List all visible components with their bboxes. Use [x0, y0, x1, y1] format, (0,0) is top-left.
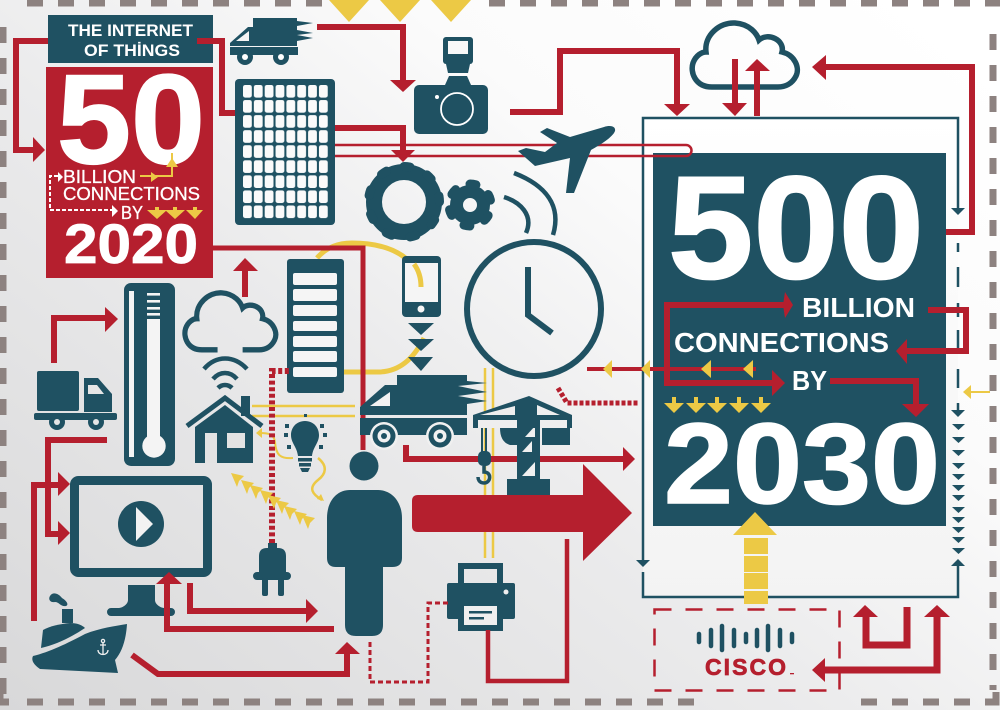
icon: crane: [473, 396, 572, 496]
icon: camera: [414, 37, 488, 134]
icon: printer: [447, 563, 515, 631]
label: connections: CONNECTIONS: [674, 327, 889, 358]
red dotted line near crane: [558, 388, 638, 403]
number: 500: 500: [668, 146, 924, 309]
icon: signal arcs: [504, 173, 555, 235]
arrow: to billion and by: [667, 292, 793, 396]
label: connections: CONNECTIONS: [63, 184, 200, 204]
icon: light bulb: [284, 414, 327, 472]
arrow: title to red panel: [16, 41, 48, 162]
logo bars: [699, 626, 792, 650]
label: by: BY: [792, 365, 827, 396]
icon: person: [327, 452, 402, 636]
arrow: camera to connections box: [510, 51, 690, 116]
white dotted connector: [50, 172, 118, 217]
arrow: truck to 2030 panel: [406, 445, 635, 471]
arrows: cloud up and down: [722, 59, 770, 116]
label: billion: BILLION: [63, 167, 136, 187]
label: by: BY: [121, 203, 143, 223]
big red arrow: [412, 464, 632, 561]
yellow triangle arrow trail: [231, 473, 315, 529]
arrow: TV to person: [190, 583, 318, 623]
yellow up arrow into panel: [733, 512, 777, 604]
icon: airplane: [518, 126, 615, 193]
panel: 50 billion connections by 2020: [46, 48, 213, 278]
yellow down arrows: [147, 207, 203, 219]
icon: big delivery truck: [360, 375, 487, 450]
arrow: by to 2030: [830, 381, 929, 417]
cisco logo box: [654, 610, 840, 690]
icon: wifi signal: [204, 358, 247, 388]
icon: phone: [402, 256, 441, 317]
logo word: CISCO: [705, 654, 786, 680]
icon: battery rack: [287, 259, 344, 393]
number: 2030: 2030: [664, 401, 940, 528]
arrow: title to solar panel: [197, 41, 264, 125]
red dotted power line: [272, 371, 291, 543]
icon: clock: [467, 242, 601, 376]
icon: plug: [253, 543, 291, 596]
title box: the internet of things: [48, 15, 213, 63]
label: billion: BILLION: [802, 292, 915, 323]
arrows: into TV screen: [34, 440, 107, 621]
arrow: middle cloud up: [233, 258, 258, 297]
cloud arrows redrawn over outline: [735, 59, 757, 116]
icon: left truck: [34, 371, 117, 430]
yellow connector lines: [252, 243, 990, 558]
arrow: 500 panel to cloud: [812, 55, 972, 232]
icon: house: [187, 396, 262, 463]
icon: thermometer device: [124, 283, 175, 466]
arrow: solar panel to gears: [333, 128, 415, 162]
yellow squiggle arrowheads: [256, 428, 324, 501]
icon: gears: [368, 166, 491, 238]
arrow: person to TV: [156, 572, 334, 629]
red double-line loop across panel: [333, 145, 692, 156]
yellow down arrows: [664, 397, 771, 413]
red connector from printer to big arrow: [488, 539, 567, 681]
icon: middle cloud: [185, 293, 276, 350]
arrow: frame to cisco: [812, 605, 950, 682]
thin teal connection frame: [636, 118, 965, 597]
arrow: truck to camera: [317, 27, 416, 92]
icon: solar panel: [235, 79, 335, 225]
number: 2020: 2020: [64, 212, 198, 275]
arrow: red panel long connector to person: [213, 248, 363, 450]
icon: top cloud: [692, 23, 797, 87]
yellow connector: [140, 153, 178, 182]
icon: ship: [32, 593, 127, 673]
yellow right-side arrow head: [963, 385, 971, 399]
arrow: ship to person: [132, 642, 360, 674]
red dotted connector from printer to person: [370, 603, 448, 682]
arrow: U-shaped return near cisco: [853, 605, 907, 645]
title box: the internet of things: OF THİNGS: [84, 41, 180, 60]
number: 50: 50: [57, 48, 205, 190]
panel: 500 billion connections by 2030: [653, 146, 966, 528]
title box: the internet of things: THE INTERNET: [68, 21, 194, 40]
arrow: billion to connections: [896, 310, 966, 364]
yellow triangles at top edge: [329, 0, 471, 22]
arrow: truck to thermometer: [54, 307, 118, 363]
down triangles below phone: [408, 323, 434, 371]
icon: top delivery truck: [230, 18, 313, 65]
icon: TV monitor with play button: [74, 480, 208, 616]
arrow: left-pointing red line with yellow heads: [587, 360, 756, 378]
